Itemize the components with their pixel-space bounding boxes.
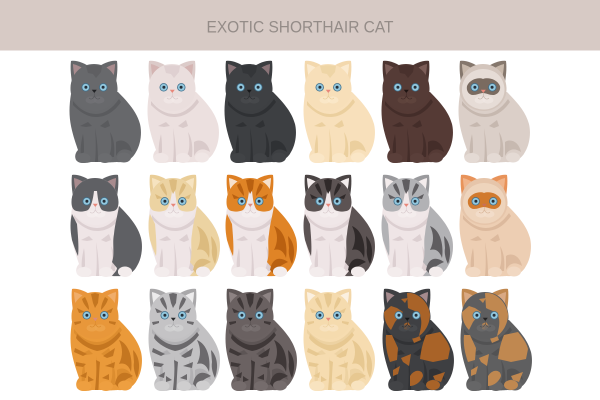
cat: black solid: [224, 61, 296, 163]
title: EXOTIC SHORTHAIR CAT: [206, 18, 394, 36]
cat: red tabby: [70, 289, 142, 391]
cat: lilac solid: [148, 61, 219, 163]
cat: cream tabby: [304, 289, 375, 391]
cat: silver tabby bicolour: [382, 175, 453, 277]
cat: blue solid: [70, 61, 141, 163]
cat: red bicolour: [226, 175, 297, 277]
cat: silver tabby: [148, 289, 220, 391]
cat: flame colourpoint: [460, 175, 531, 277]
cat: seal colourpoint: [458, 61, 530, 163]
cat: blue tortoiseshell: [460, 289, 532, 391]
cat: black tortoiseshell: [382, 289, 454, 391]
cat: chocolate solid: [382, 61, 453, 163]
cat: brown-grey tabby: [226, 289, 297, 391]
cat: cream bicolour: [148, 175, 220, 277]
cat: cream solid: [304, 61, 375, 163]
cat: blue bicolour: [70, 175, 142, 277]
header band: [0, 0, 600, 50]
cat: black tabby bicolour: [304, 175, 375, 277]
